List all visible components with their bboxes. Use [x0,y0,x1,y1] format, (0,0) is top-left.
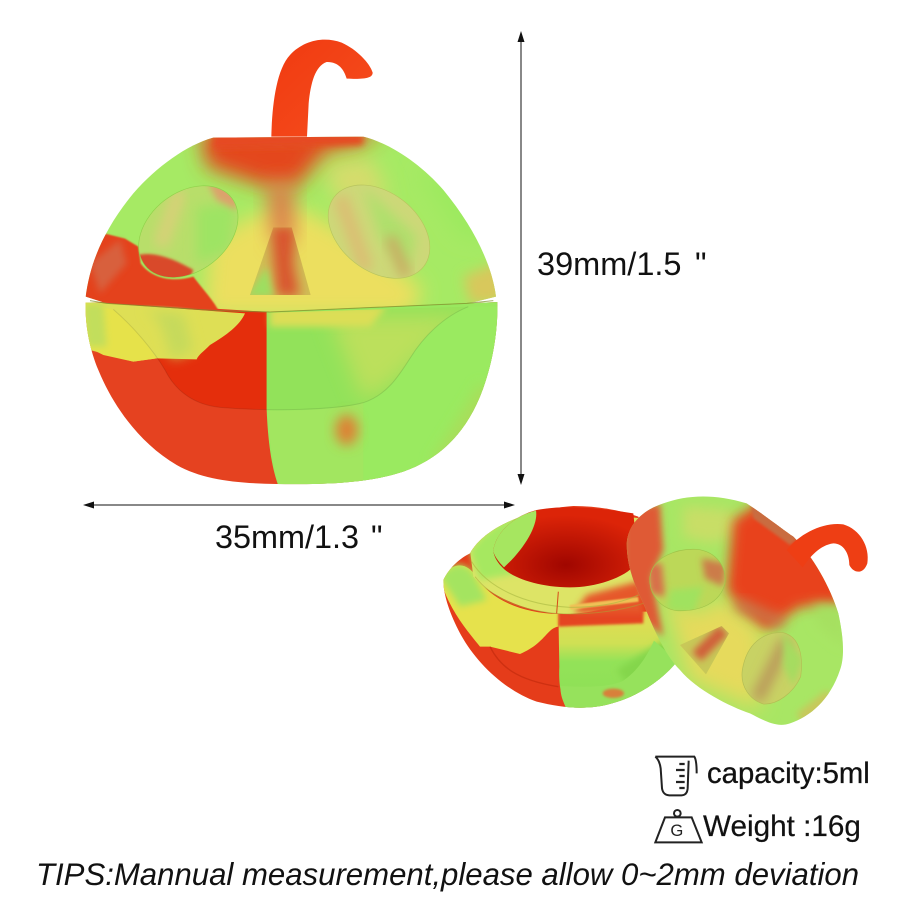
icon: measuring cup [655,757,697,795]
nose [250,228,310,295]
rim [470,511,643,614]
right cheek [364,306,498,480]
lower green section [558,612,675,708]
opened lid stem [787,524,868,572]
opened lid right eye [742,633,801,704]
yellow swirl [83,302,245,362]
opened lid nose [680,626,729,674]
bowl green inner wall [493,511,536,567]
right eye [328,186,430,278]
mouth recess [158,309,450,410]
stem [271,40,373,137]
width label: " [371,519,382,555]
lid opened [626,496,843,725]
open pumpkin jar [443,496,868,725]
orange blemish [335,415,358,445]
width label: 35mm/1.3 [215,519,359,555]
width dimension arrow [83,502,515,508]
left eye [139,186,238,278]
large closed pumpkin jar [70,40,537,497]
opened lid left eye [650,550,724,610]
capacity text: capacity:5ml [707,757,870,790]
left red groove [490,647,558,687]
bowl [443,506,675,708]
mouth edges [113,307,468,410]
bowl opening [493,507,638,587]
height dimension arrow [518,31,524,485]
tips note: TIPS:Mannual measurement,please allow 0~2mm deviation [36,857,859,892]
weight text: Weight :16g [703,810,861,843]
base [86,302,498,484]
height label: " [695,246,707,282]
icon: weight: G [670,821,683,840]
lid [86,136,496,312]
green half with curved seam [266,302,498,484]
yellow shoulder [440,565,558,654]
icon: weight [655,810,702,842]
height label: 39mm/1.5 [537,246,682,282]
seam between lid and base [90,301,493,312]
